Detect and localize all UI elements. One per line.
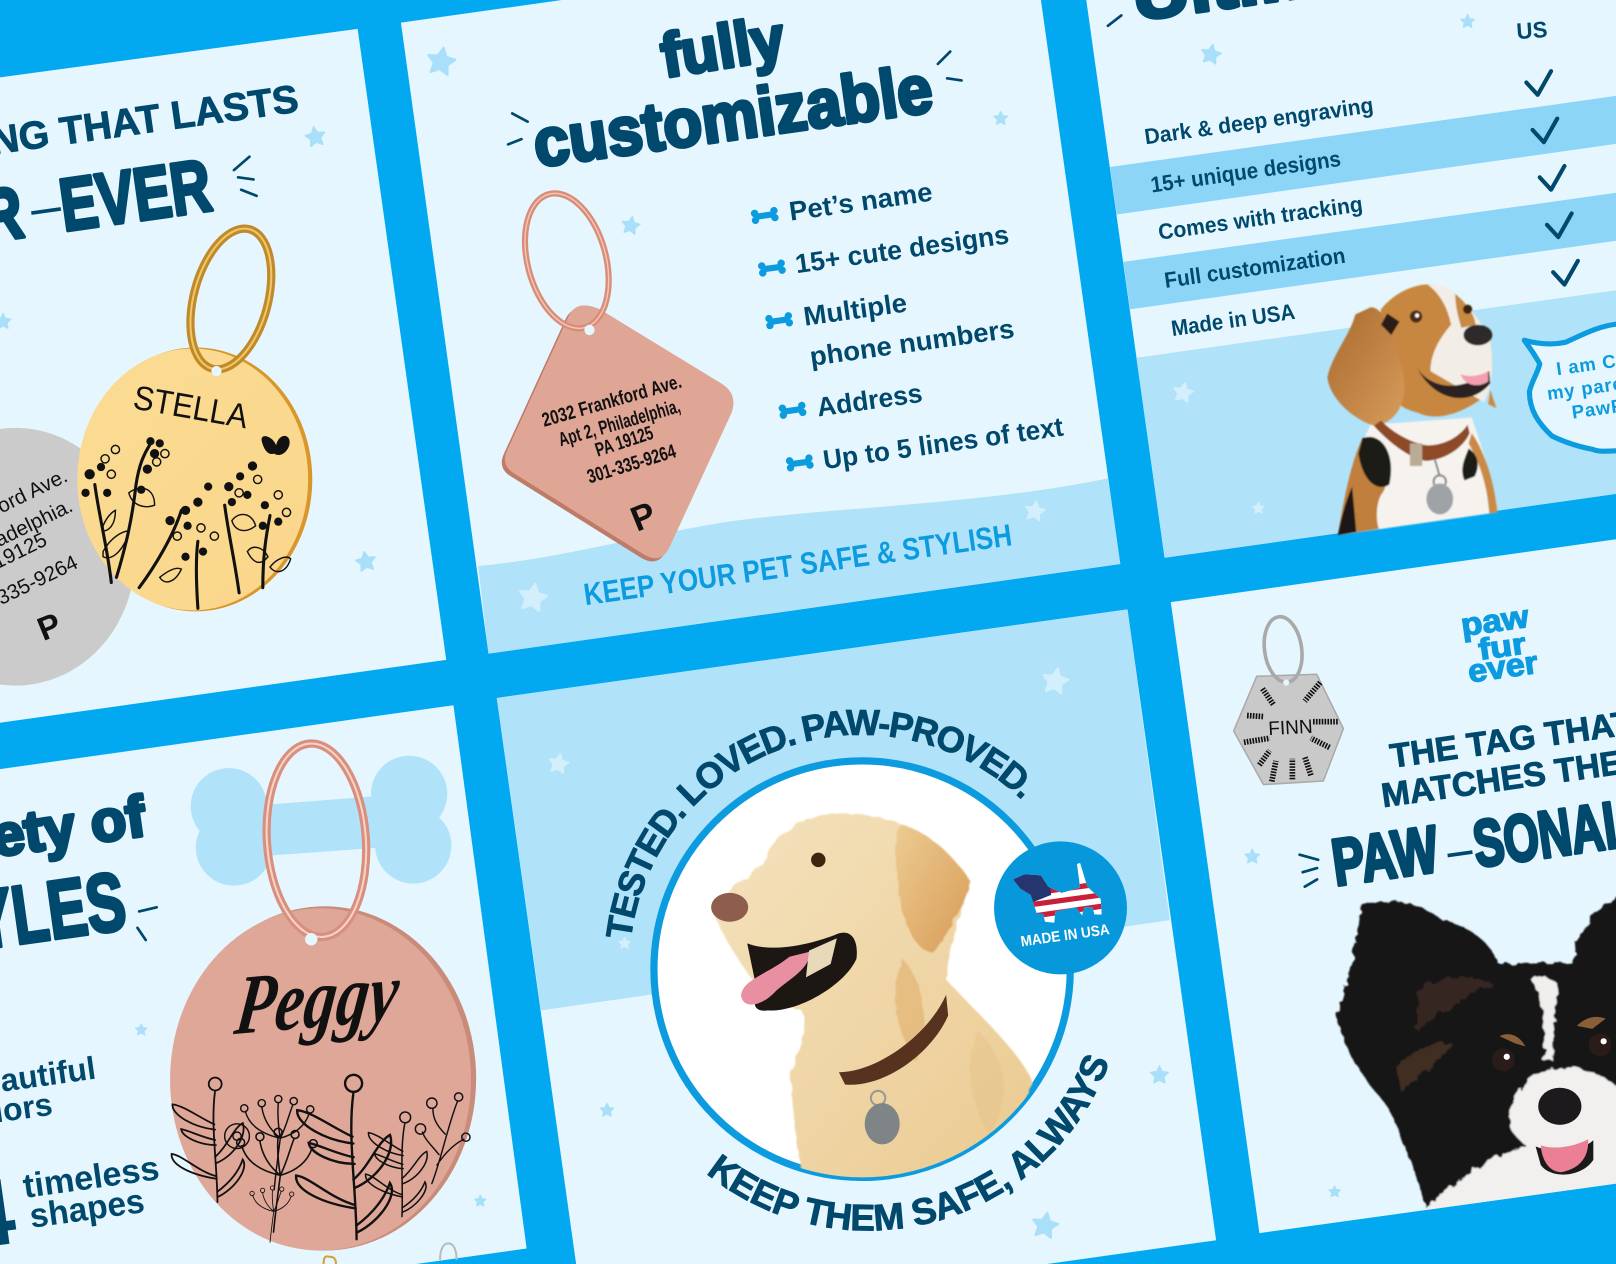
- rose gold diamond tag: 2032 Frankford Ave.: [539, 371, 684, 432]
- stars: [1200, 14, 1474, 65]
- bullet: lines of text: Up to 5 lines of text: [821, 412, 1065, 475]
- rose gold diamond tag: P: [625, 494, 662, 539]
- shapes text: [21, 1149, 162, 1236]
- panel 1 background: [0, 29, 446, 723]
- lower stars: [1172, 381, 1264, 513]
- band caption: KEEP YOUR PET SAFE & STYLISH: [581, 517, 1014, 612]
- badge: made in USA: [994, 841, 1127, 974]
- big heading: PAW: PAW: [1327, 811, 1443, 899]
- small rings at the bottom: [324, 1243, 457, 1264]
- logo: [1458, 598, 1540, 689]
- row band 2: [1123, 193, 1616, 309]
- accent ticks: [1300, 855, 1318, 887]
- feature list: [750, 177, 1065, 475]
- grey tag: [0, 428, 135, 686]
- panel 3 background: [1086, 0, 1616, 558]
- accent ticks: [508, 52, 962, 144]
- row labels: Comes with tracking: [1157, 191, 1364, 245]
- arc text bottom: KEEP THEM SAFE, ALWAYS: [707, 1055, 1108, 1231]
- dog artwork: [1337, 887, 1616, 1237]
- rose gold round tag: Peggy: Peggy: [230, 945, 405, 1053]
- hexagon silver tag: Finn: [1234, 614, 1343, 785]
- arc text top: TESTED. LOVED. PAW-PROVED.: [606, 710, 1027, 937]
- panel: tested loved paw-proved: [496, 609, 1216, 1264]
- logo: paw: [1458, 598, 1531, 643]
- row band 1: [1110, 96, 1616, 214]
- accent ticks: [137, 907, 157, 940]
- golden retriever photo: [711, 813, 1033, 1186]
- upper stars: [548, 666, 1070, 948]
- colors text: [0, 1050, 98, 1135]
- bullet: address: Address: [815, 378, 924, 422]
- bullet: phone numbers: phone numbers: [808, 314, 1016, 372]
- bottom wave band: [478, 478, 1120, 654]
- papillon dog photo: [1337, 887, 1616, 1237]
- grey tag: P: [32, 605, 66, 648]
- beagle: [1327, 284, 1497, 535]
- heading line 2: EVER: EVER: [55, 143, 216, 247]
- panel 4 background: [0, 705, 527, 1264]
- lower stars: [600, 1066, 1168, 1239]
- heading line 2: dash: -: [24, 189, 68, 228]
- bone shape: [191, 756, 451, 886]
- big heading: dash: -: [1441, 832, 1478, 871]
- hexagon silver tag: Finn: FINN: [1268, 716, 1313, 740]
- panel: engraving that lasts fur-ever: [0, 29, 446, 723]
- accent ticks: [234, 157, 257, 196]
- rose gold diamond tag: PA 19125: [593, 422, 656, 461]
- shapes text: shapes: [27, 1182, 147, 1236]
- heading: fully: fully: [656, 4, 790, 91]
- shapes text: timeless: [21, 1149, 162, 1206]
- bullet: phone numbers: Multiple: [802, 288, 909, 332]
- panel: comparison table: [1086, 0, 1616, 558]
- stars: [0, 125, 377, 572]
- row labels: Dark & deep engraving: [1143, 92, 1375, 149]
- stars: [1245, 849, 1341, 1197]
- panel: fully customizable: [401, 0, 1120, 654]
- row labels: Made in USA: [1170, 299, 1297, 341]
- rose gold diamond tag: 301-335-9264: [585, 440, 679, 488]
- rose gold diamond tag: [502, 184, 733, 561]
- accent tick: [1108, 15, 1121, 26]
- panel 5 background: [497, 609, 1216, 1264]
- stars: [426, 45, 1008, 235]
- panel: variety of styles: [0, 705, 527, 1264]
- row labels: 15+ unique designs: [1149, 146, 1342, 197]
- rose gold round tag: Peggy: [162, 740, 476, 1251]
- dog artwork: [713, 813, 1033, 1186]
- gold tag: Stella: STELLA: [131, 379, 251, 436]
- column head: US: [1516, 16, 1548, 44]
- logo: fur: [1476, 627, 1528, 667]
- badge: made in USA: MADE IN USA: [1020, 921, 1111, 950]
- mouth, nose and eye: [711, 853, 948, 1144]
- bullet: phone numbers: [765, 288, 1016, 372]
- bullet: designs: 15+ cute designs: [793, 219, 1011, 279]
- check marks: [1526, 71, 1578, 285]
- speech bubble: [1524, 324, 1616, 451]
- gold tag: Stella: [77, 220, 312, 611]
- bullet: pet's name: Pet’s name: [787, 177, 934, 227]
- lower area: [1136, 290, 1616, 558]
- circle frame: [654, 761, 1070, 1177]
- rose gold diamond tag: Apt 2, Philadelphia,: [556, 395, 683, 451]
- heading: customizable: customizable: [528, 51, 937, 182]
- upper colour block: [497, 609, 1170, 1010]
- stars: [135, 1024, 486, 1206]
- logo: ever: [1466, 644, 1540, 689]
- row labels: [1143, 92, 1375, 341]
- panel 2 background: [401, 0, 1120, 654]
- panel 6 background: [1171, 539, 1616, 1233]
- row labels: Full customization: [1163, 243, 1347, 293]
- panel: paw-sonality: [1171, 539, 1616, 1237]
- face details: [1492, 1017, 1611, 1175]
- band stars: [517, 500, 1046, 612]
